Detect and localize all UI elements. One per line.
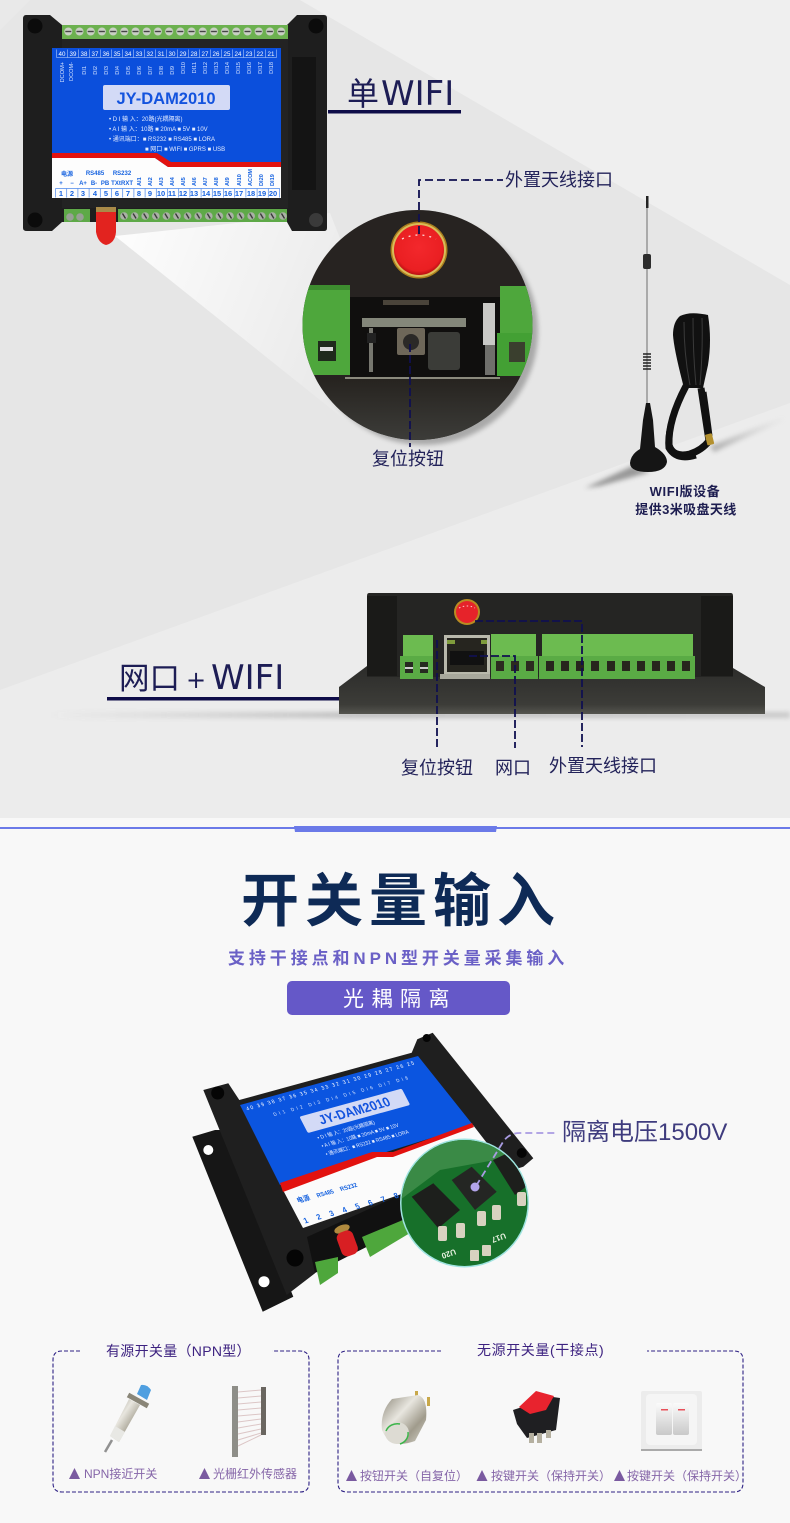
top pin numbers: 36 — [103, 51, 110, 58]
top pin numbers: 31 — [158, 51, 165, 58]
bottom pin numbers: 12 — [179, 189, 187, 198]
callout: network port — [469, 656, 531, 778]
specification lines: • A I 输 入：10路 ■ 20mA ■ 5V ■ 10V — [109, 125, 208, 133]
bottom pin numbers: 16 — [224, 189, 232, 198]
top pin numbers: 28 — [191, 51, 198, 58]
bottom pin numbers: 18 — [247, 189, 255, 198]
input channel labels: DI17 — [258, 62, 264, 74]
background: upper product section — [0, 0, 790, 818]
circle shadow — [310, 217, 538, 445]
background: lower section — [0, 818, 790, 1523]
bottom pin labels: DI20 — [259, 174, 265, 186]
input channel labels — [60, 62, 275, 82]
zoom circle: antenna port and reset button — [300, 208, 540, 448]
input channel labels: DI15 — [236, 62, 242, 74]
bottom pin numbers: 3 — [81, 189, 85, 198]
top pin numbers: 24 — [235, 51, 242, 58]
bottom pin numbers: 10 — [157, 189, 165, 198]
angled pin labels: RS485 — [316, 1189, 336, 1199]
callout: external antenna port — [419, 170, 613, 234]
callout: side reset button — [401, 640, 473, 778]
bottom pin numbers: 17 — [235, 189, 243, 198]
case body — [203, 1033, 533, 1295]
section divider — [0, 826, 790, 832]
input channel labels: DI14 — [225, 62, 231, 74]
callout: reset button — [372, 344, 444, 469]
input channel labels: DI13 — [214, 62, 220, 74]
bottom pin labels: RS485 — [86, 171, 105, 177]
heading: network port + WIFI: WIFI — [211, 658, 284, 698]
top pin numbers: 39 — [70, 51, 77, 58]
angled antenna connector — [333, 1223, 360, 1258]
top pin numbers: 38 — [81, 51, 88, 58]
icon: wall switch — [641, 1391, 702, 1451]
bottom pin labels: AI6 — [192, 177, 198, 186]
bottom pin labels: AI1 — [137, 177, 143, 186]
angled label text — [245, 1060, 475, 1225]
heading: network port + WIFI: 网口 — [119, 662, 180, 697]
bottom pin numbers: 4 — [93, 189, 98, 198]
bottom pin labels: RS232 — [113, 171, 132, 177]
panel border — [53, 1351, 309, 1492]
angled specification lines: • A I 输 入：10路 ■ 20mA ■ 5V ■ 10V — [320, 1121, 401, 1150]
angled pin labels: 电源 — [295, 1193, 312, 1205]
panel: active switches — [53, 1343, 309, 1492]
bottom pin labels: TXt — [111, 181, 121, 187]
panel: passive switches — [338, 1342, 747, 1492]
angled model plate — [299, 1089, 410, 1133]
input channel labels: DI3 — [104, 66, 110, 75]
input channel labels: DI1 — [82, 66, 88, 75]
input channel labels: DI6 — [137, 66, 143, 75]
specification lines: ■ 网口 ■ WIFI ■ GPRS ■ USB — [145, 146, 225, 153]
input channel labels: DI11 — [192, 62, 198, 73]
top pin numbers: 37 — [92, 51, 99, 58]
bottom pin numbers: 9 — [148, 189, 152, 198]
badge: optocoupler isolation: 光耦隔离 — [343, 988, 457, 1011]
heading: single WIFI — [328, 74, 461, 114]
top pin numbers: 40 — [59, 51, 66, 58]
antenna caption: WIFI版设备 — [650, 484, 720, 499]
badge: optocoupler isolation — [287, 981, 510, 1015]
bottom pin labels: AI9 — [225, 177, 231, 186]
input channel labels: DI9 — [170, 66, 176, 75]
antenna port — [454, 599, 480, 625]
RJ45 port — [440, 635, 490, 679]
bottom pin numbers: 20 — [269, 189, 277, 198]
inset magnifier: PCB detail — [400, 1138, 535, 1268]
top pin numbers: 26 — [213, 51, 220, 58]
bottom pin numbers: 8 — [137, 189, 141, 198]
bottom pin labels: AI5 — [181, 177, 187, 186]
green terminal: middle — [491, 634, 538, 679]
heading: network port + WIFI — [107, 658, 339, 700]
product photo: magnetic antenna — [630, 196, 714, 472]
icon: push button switch — [382, 1391, 430, 1444]
caption: push button: 按钮开关（自复位） — [360, 1468, 468, 1483]
top pin numbers — [56, 50, 276, 58]
heading: single WIFI: 单 — [347, 75, 379, 113]
case base — [339, 666, 765, 714]
coiled cable — [668, 313, 714, 458]
angled pin labels — [292, 1170, 404, 1225]
specification lines: • D I 输 入：20路(光耦隔离) — [109, 115, 182, 123]
top pin numbers: 25 — [224, 51, 231, 58]
top pin numbers: 34 — [125, 51, 132, 58]
angled specification lines: • 通讯端口：■ RS232 ■ RS485 ■ LORA — [324, 1127, 411, 1158]
bottom pin numbers: 2 — [70, 189, 74, 198]
input channel labels: DI10 — [181, 62, 187, 74]
bottom pin numbers: 1 — [59, 189, 63, 198]
bottom pin labels: AI3 — [159, 177, 165, 186]
bottom pin labels: ACOM — [248, 169, 254, 186]
case back — [367, 593, 733, 682]
bottom pin numbers: 11 — [168, 189, 176, 198]
chips — [412, 1154, 526, 1228]
callout: network port: 网口 — [495, 758, 531, 778]
callout: external antenna port: 外置天线接口 — [505, 170, 613, 190]
bottom pin labels: AI7 — [203, 177, 209, 186]
bottom pin labels: RXT — [121, 181, 133, 187]
input channel labels: DI5 — [126, 66, 132, 75]
top pin numbers: 29 — [180, 51, 187, 58]
green terminal: right — [539, 634, 695, 679]
callout: isolation voltage: 隔离电压1500V — [562, 1119, 727, 1146]
callout: reset button: 复位按钮 — [372, 449, 444, 469]
whip — [646, 196, 648, 405]
bottom pin numbers: 6 — [115, 189, 119, 198]
model name plate: JY-DAM2010 — [116, 90, 216, 108]
input channel labels: DI16 — [247, 62, 253, 74]
icon: infrared light curtain — [232, 1386, 266, 1457]
angled model plate: JY-DAM2010 — [316, 1094, 393, 1128]
input channel labels: DI18 — [269, 62, 275, 74]
product photo: perspective view — [192, 1033, 533, 1312]
mounting rail — [192, 1130, 293, 1312]
heading: network port + WIFI: + — [186, 666, 206, 694]
bottom pin numbers: 13 — [190, 189, 198, 198]
panel title: 有源开关量（NPN型） — [106, 1343, 251, 1359]
caption: NPN sensor: NPN接近开关 — [84, 1466, 157, 1481]
bottom pin labels: PB — [101, 181, 110, 187]
icon: NPN proximity sensor — [105, 1385, 151, 1452]
mounting holes — [203, 1034, 527, 1287]
input channel labels: DI4 — [115, 66, 121, 75]
inset magnifier: PCB detail: U17 — [490, 1231, 507, 1245]
device label — [52, 48, 281, 198]
bottom pin numbers: 15 — [213, 189, 221, 198]
top pin numbers: 27 — [202, 51, 209, 58]
angled label surface — [240, 1056, 500, 1228]
antenna caption: 提供3米吸盘天线 — [635, 502, 737, 517]
angled channel labels: DI1 DI2 DI3 DI4 DI5 DI6 DI7 DI8 — [272, 1075, 412, 1118]
floor shadow under antenna — [585, 416, 785, 488]
input channel labels: DI12 — [203, 62, 209, 74]
bottom pin labels: + — [59, 181, 63, 187]
callout: isolation voltage — [470, 1119, 727, 1192]
bottom pin labels: AI2 — [148, 177, 154, 186]
antenna caption — [635, 484, 737, 517]
bottom pin labels: B- — [91, 181, 97, 187]
red antenna port — [390, 222, 448, 278]
input channel labels: DCOM- — [69, 62, 75, 81]
angled pin labels: RS232 — [339, 1183, 359, 1193]
top pin numbers: 21 — [268, 51, 275, 58]
terminal strip: bottom — [64, 208, 287, 222]
bottom pin numbers: 5 — [104, 189, 108, 198]
input channel labels: DCOM+ — [60, 62, 66, 82]
input channel labels: DI8 — [159, 66, 165, 75]
callout: side antenna port: 外置天线接口 — [549, 756, 657, 776]
top pin numbers: 23 — [246, 51, 253, 58]
panel border — [338, 1351, 743, 1492]
bottom pin labels: DI19 — [270, 174, 276, 186]
specification lines: • 通讯端口：■ RS232 ■ RS485 ■ LORA — [109, 135, 215, 143]
section title: 开关量输入 — [241, 869, 561, 934]
panel title: 无源开关量(干接点) — [477, 1342, 604, 1358]
heading: single WIFI: WIFI — [381, 74, 454, 114]
section subtitle: 支持干接点和NPN型开关量采集输入 — [228, 948, 568, 968]
callout: side antenna port — [475, 621, 657, 776]
bottom pin labels — [59, 169, 276, 187]
bottom pin numbers: 14 — [202, 189, 211, 198]
angled pin labels: 1 2 3 4 5 6 7 8 — [302, 1190, 404, 1225]
callout: side reset button: 复位按钮 — [401, 758, 473, 778]
bottom pin numbers — [56, 188, 280, 198]
floor shadow under side view — [50, 712, 790, 718]
top pin numbers: 32 — [147, 51, 154, 58]
input channel labels: DI7 — [148, 66, 154, 75]
bottom pin labels: AI8 — [214, 177, 220, 186]
top pin numbers: 22 — [257, 51, 264, 58]
bottom green terminals — [315, 1257, 338, 1285]
bottom pin numbers: 7 — [126, 189, 130, 198]
caption: rocker: 按键开关（保持开关） — [491, 1468, 611, 1483]
green terminal: left — [400, 635, 433, 679]
green terminal: right — [497, 286, 532, 376]
solder pads — [438, 1192, 526, 1261]
bottom pin labels: − — [70, 181, 74, 187]
antenna connector — [96, 207, 116, 245]
icon: rocker switch — [513, 1391, 560, 1443]
magnetic base — [630, 403, 667, 472]
bottom pin labels: AI10 — [237, 174, 243, 186]
top pin numbers: 33 — [136, 51, 143, 58]
product photo: side view with ports — [339, 593, 765, 714]
product photo: top view of the device — [23, 15, 327, 245]
caption: light curtain: 光栅红外传感器 — [213, 1466, 297, 1481]
input channel labels: DI2 — [93, 66, 99, 75]
angled channel numbers: 40 39 38 37 36 35 34 33 32 31 30 29 28 27 26 25 — [245, 1060, 417, 1112]
device body — [23, 15, 327, 231]
silkscreen: U20 — [440, 1247, 457, 1261]
bottom pin labels: A+ — [79, 181, 87, 187]
angled specification lines: • D I 输 入：20路(光耦隔离) — [315, 1118, 377, 1141]
terminal strip: top — [62, 25, 288, 39]
angled specification lines — [315, 1111, 411, 1158]
specification lines — [109, 115, 225, 153]
caption: wall switch: 按键开关（保持开关） — [627, 1468, 747, 1483]
top pin numbers: 35 — [114, 51, 121, 58]
top pin numbers: 30 — [169, 51, 176, 58]
bottom pin numbers: 19 — [258, 189, 266, 198]
bottom pin labels: AI4 — [170, 176, 176, 186]
green terminal: left — [300, 285, 350, 375]
model name plate — [103, 85, 230, 110]
bottom pin labels: 电源 — [61, 170, 73, 178]
